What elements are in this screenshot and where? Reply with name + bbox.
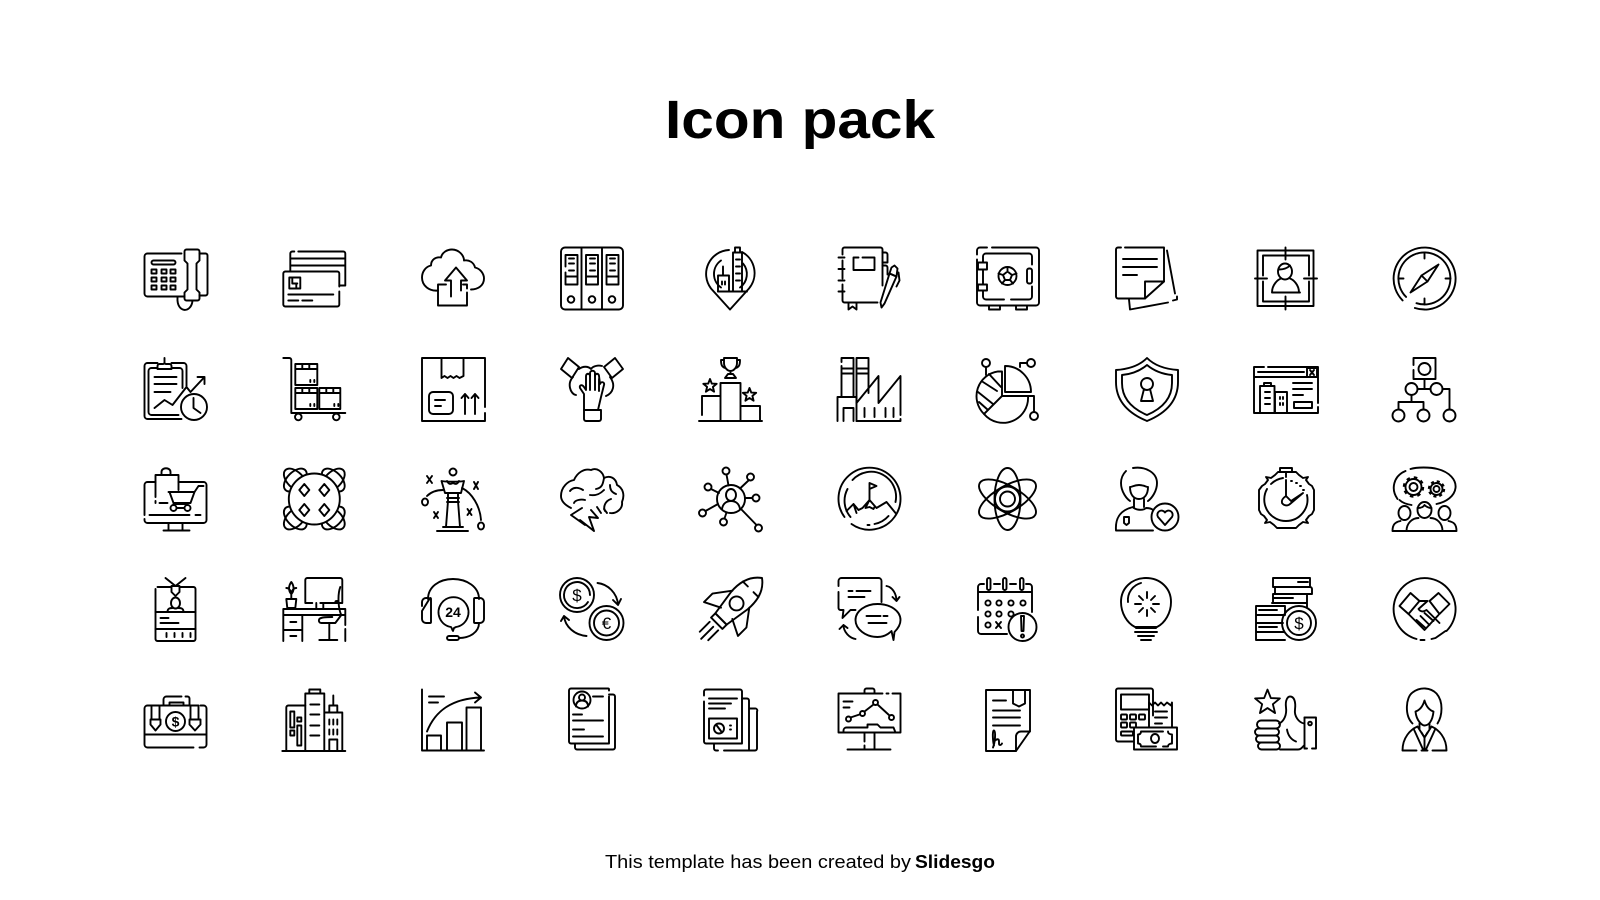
icon: sticky note [1116,248,1177,310]
icon: signed contract [986,690,1030,751]
icon: factory [838,358,900,421]
icon: person with heart [1116,468,1178,530]
icon: conversation bubbles [838,578,900,640]
icon: browser window [1254,367,1318,413]
icon: growth chart [422,690,484,750]
icon: business woman [1402,688,1446,750]
icon: safe [977,248,1039,310]
icon: idea light bulb [1121,578,1171,640]
icon: currency exchange: $ [572,586,582,605]
icon: cloud brain storm [561,469,623,531]
icon: calendar alert [978,578,1036,641]
icon: winners podium [699,358,762,421]
icon: handshake [1394,578,1456,640]
icon: org chart [1392,358,1456,422]
icon: resume [569,688,615,750]
icon: city buildings [282,690,345,751]
icon: briefcase with money [144,696,206,748]
icon: stacks of coins [1256,578,1316,640]
icon: office desk [283,578,345,641]
icon: network people [699,468,762,532]
icon: atom [973,468,1042,530]
icon: pie chart with nodes [977,359,1038,423]
icon: thumbs up with star [1255,690,1316,750]
icon: person target [1255,248,1317,310]
icon: team hands [561,358,623,421]
icon: cardboard box [422,358,485,421]
icon: mountain flag badge [838,468,900,530]
icon: report folder [704,690,757,750]
icon: compass [1394,248,1456,310]
icon: desk phone [144,250,208,310]
icon: security shield [1116,358,1178,421]
icon: chess strategy [422,468,484,531]
footer credit: This template has been created by [605,852,911,872]
icon: currency exchange [560,578,624,640]
icon: 24 hour support headset [422,579,484,640]
icon: binders [561,248,623,310]
title: Icon pack [665,90,936,150]
icon: credit cards [283,252,345,306]
icon: 24 hour support headset: 24 [445,604,461,620]
icon: id badge [156,578,196,641]
icon: notebook and pen [838,248,900,310]
icon: online shopping monitor [144,468,206,530]
icon: team ideas gears [1392,468,1456,531]
icon: stacks of coins: $ [1294,614,1304,633]
icon: presentation board [838,688,900,750]
icon: circular table with loops [280,464,349,534]
icon: clipboard with chart and clock [144,358,207,420]
icon: warehouse trolley [283,358,345,420]
icon: calculator and bill [1116,688,1177,750]
footer credit: Slidesgo [915,852,995,872]
icon: cloud upload [422,250,484,306]
icon: city location pin [706,248,755,310]
icon: currency exchange: € [602,614,612,633]
icon: briefcase with money: $ [172,714,180,730]
icon: stopwatch gear [1259,468,1314,528]
icon: rocket [684,561,779,656]
